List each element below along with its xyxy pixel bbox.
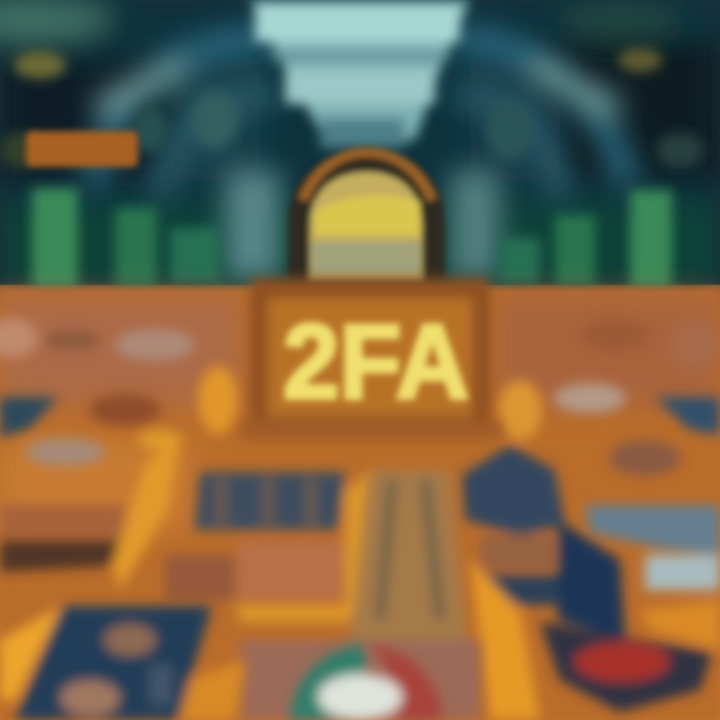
ground tone patches [0,295,720,530]
floor tiles and devices: left [0,318,375,622]
arches: curved ribs around the tower [95,40,625,190]
tower base glow [225,170,500,280]
speckles: dim lights in the hall [0,48,704,168]
background: dark upper hall [0,0,720,290]
green pillars [32,188,672,290]
orange sign [26,131,138,167]
padlock body [240,278,502,440]
padlock label: 2FA: 2FA [283,303,469,421]
circular tricolor badge [290,645,442,720]
path: central striped road [240,470,480,720]
floor tiles and devices: right [462,319,720,720]
ground: orange brown floor [0,288,720,720]
bottom left panel: dark device [0,606,245,720]
padlock shackle [288,150,445,282]
tower: central light column [250,0,470,148]
